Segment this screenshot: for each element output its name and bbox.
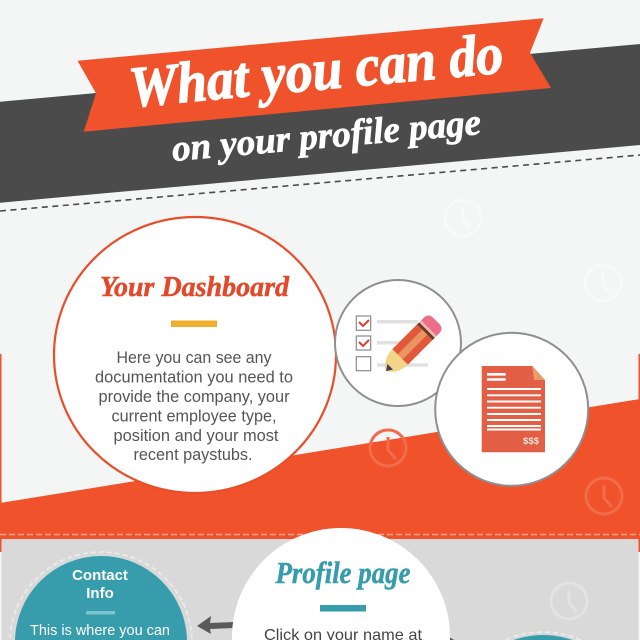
dashboard description: provide the company, your bbox=[98, 388, 290, 406]
icon: payslip document: $$$ bbox=[523, 436, 540, 447]
contact description: This is where you can bbox=[30, 622, 170, 639]
panel: contact info bbox=[10, 552, 192, 640]
contact heading: Info bbox=[86, 585, 114, 602]
panel: profile page bbox=[232, 528, 450, 640]
dashboard accent bar bbox=[171, 320, 217, 327]
contact dashed ring bbox=[10, 552, 192, 640]
profile heading: Profile page bbox=[275, 555, 411, 590]
contact heading: Contact bbox=[72, 567, 128, 584]
contact accent bar bbox=[86, 611, 115, 614]
contact heading bbox=[72, 567, 128, 602]
ribbon bbox=[78, 18, 551, 132]
arrow: to contact info bbox=[197, 616, 234, 634]
icon: checklist and pencil bbox=[335, 280, 461, 406]
orange diagonal section bbox=[0, 354, 640, 552]
icon: payslip document bbox=[435, 333, 588, 486]
dashboard description: position and your most bbox=[114, 427, 279, 445]
arrow: to right panel bbox=[449, 637, 456, 640]
panel: your dashboard bbox=[54, 217, 336, 493]
profile circle bbox=[232, 528, 450, 640]
dashboard heading: Your Dashboard bbox=[100, 271, 289, 303]
profile accent bar bbox=[320, 605, 366, 612]
dashed divider: header bbox=[0, 155, 640, 211]
dashed divider: orange section bbox=[0, 534, 640, 536]
dashboard description: recent paystubs. bbox=[134, 446, 252, 464]
dashboard circle ring bbox=[54, 217, 336, 493]
dashboard description: documentation you need to bbox=[95, 368, 293, 386]
subtitle: on your profile page bbox=[170, 102, 483, 170]
dark header band bbox=[0, 44, 640, 203]
contact circle bbox=[15, 556, 187, 640]
title: What you can do bbox=[126, 21, 506, 120]
panel: right teal circle bbox=[450, 632, 636, 640]
dashboard description bbox=[95, 349, 293, 464]
grey section bbox=[2, 539, 638, 640]
dashboard description: Here you can see any bbox=[116, 349, 272, 367]
clock watermarks bbox=[370, 200, 622, 619]
dashboard description: current employee type, bbox=[112, 408, 276, 426]
